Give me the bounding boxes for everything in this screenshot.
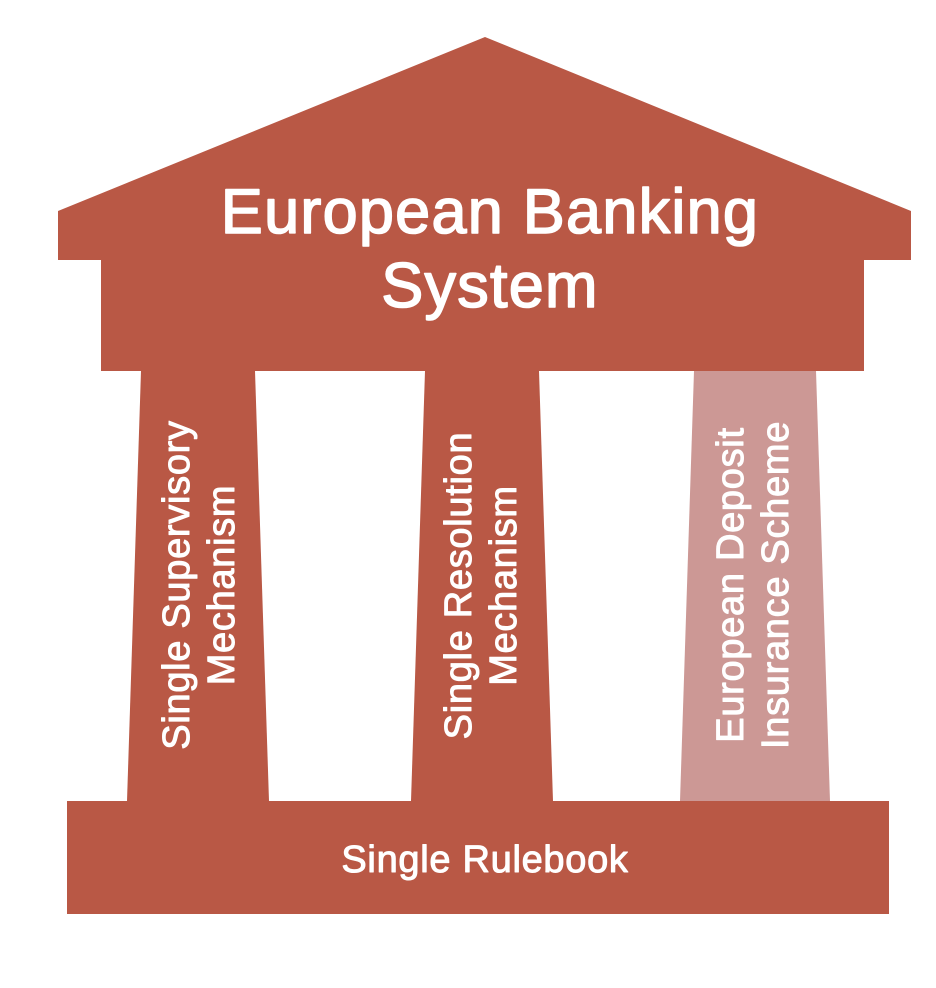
pillar: Single Supervisory Mechanism xyxy=(127,371,269,801)
pillar: European Deposit Insurance Scheme: Insurance Scheme xyxy=(755,421,797,749)
roof and entablature xyxy=(58,37,911,371)
pillar: European Deposit Insurance Scheme xyxy=(680,371,830,801)
pillar: Single Resolution Mechanism xyxy=(411,371,553,801)
pillar: Single Supervisory Mechanism: Mechanism xyxy=(201,485,243,685)
base: Single Rulebook: Single Rulebook xyxy=(341,839,629,881)
base: Single Rulebook xyxy=(67,801,889,914)
pillar: Single Supervisory Mechanism: Single Supervisory xyxy=(156,420,198,750)
pillar: Single Resolution Mechanism: Mechanism xyxy=(483,485,525,686)
title: System xyxy=(381,251,599,321)
title: European Banking xyxy=(221,177,759,247)
pillar: European Deposit Insurance Scheme: European Deposit xyxy=(710,427,752,743)
pillar: Single Resolution Mechanism: Single Resolution xyxy=(438,432,480,739)
